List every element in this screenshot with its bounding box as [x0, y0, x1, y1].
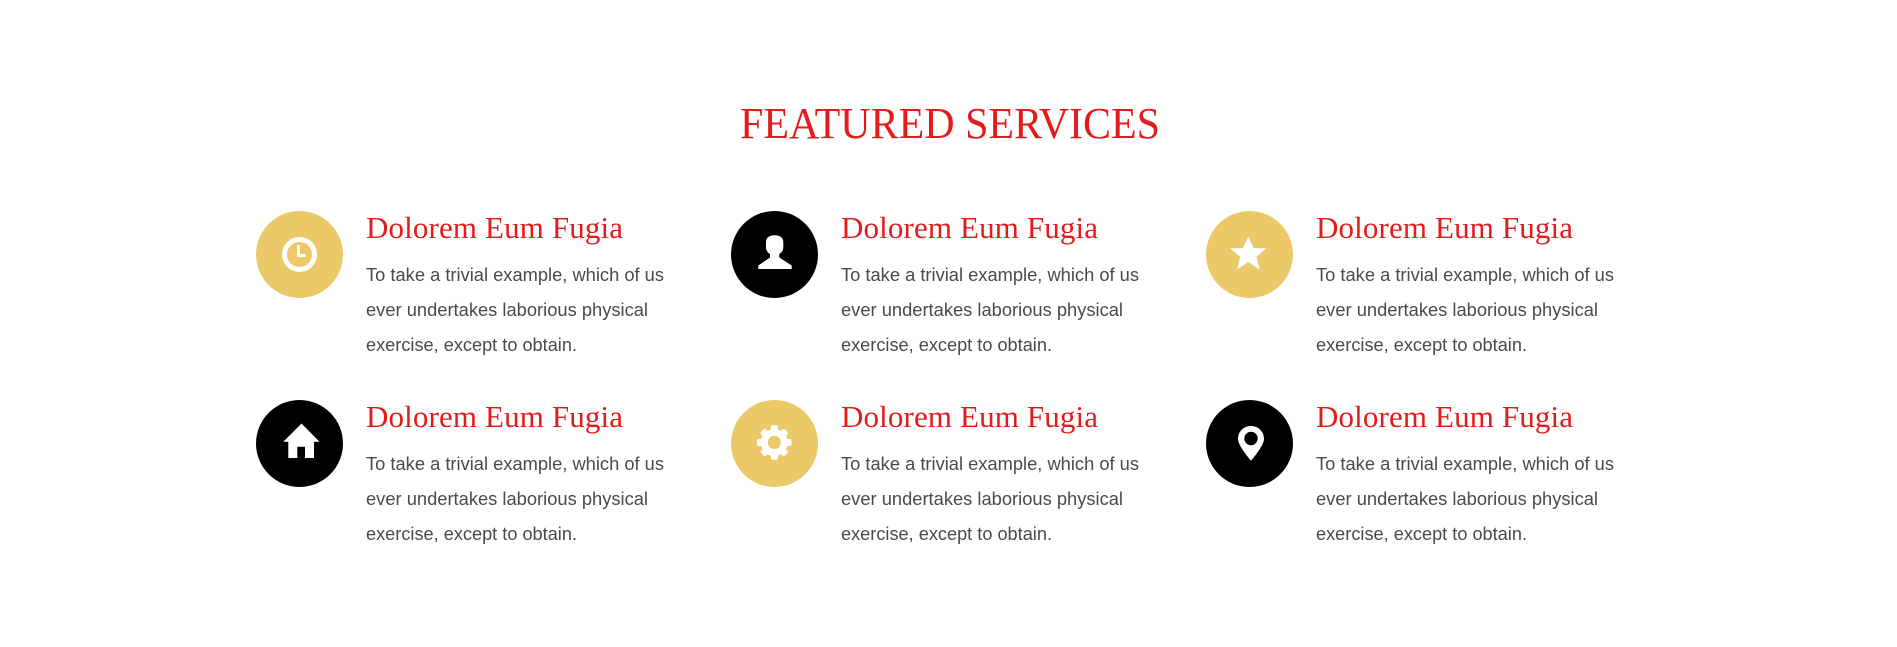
text block: To take a trivial example, which of us [366, 264, 664, 285]
panel: service 1 clock [256, 210, 664, 355]
text block [366, 264, 664, 355]
heading: Dolorem Eum Fugia [366, 399, 623, 434]
icon: gear [731, 400, 818, 487]
text block: ever undertakes laborious physical [1316, 488, 1598, 509]
text block: exercise, except to obtain. [841, 523, 1052, 544]
text block [841, 453, 1139, 544]
text block: ever undertakes laborious physical [366, 488, 648, 509]
text block [841, 264, 1139, 355]
text block: To take a trivial example, which of us [366, 453, 664, 474]
text block: exercise, except to obtain. [366, 523, 577, 544]
text block: exercise, except to obtain. [366, 334, 577, 355]
icon: star [1206, 211, 1293, 298]
icon: user [731, 211, 818, 298]
panel: service 6 location [1206, 399, 1614, 544]
text block: ever undertakes laborious physical [1316, 299, 1598, 320]
text block: To take a trivial example, which of us [1316, 453, 1614, 474]
panel: service 5 settings [731, 399, 1139, 544]
text block: ever undertakes laborious physical [366, 299, 648, 320]
heading: Dolorem Eum Fugia [841, 210, 1098, 245]
text block: ever undertakes laborious physical [841, 299, 1123, 320]
icon: clock [256, 211, 343, 298]
text block: exercise, except to obtain. [841, 334, 1052, 355]
text block: exercise, except to obtain. [1316, 523, 1527, 544]
text block: To take a trivial example, which of us [1316, 264, 1614, 285]
heading: Dolorem Eum Fugia [841, 399, 1098, 434]
panel: service 2 user [731, 210, 1139, 355]
heading: Dolorem Eum Fugia [1316, 210, 1573, 245]
panel: service 3 star [1206, 210, 1614, 355]
icon: house [256, 400, 343, 487]
text block: exercise, except to obtain. [1316, 334, 1527, 355]
icon: map pin [1206, 400, 1293, 487]
heading: Dolorem Eum Fugia [366, 210, 623, 245]
panel: service 4 home [256, 399, 664, 544]
text block [1316, 264, 1614, 355]
heading: Dolorem Eum Fugia [1316, 399, 1573, 434]
text block: ever undertakes laborious physical [841, 488, 1123, 509]
text block: To take a trivial example, which of us [841, 453, 1139, 474]
title: FEATURED SERVICES [740, 99, 1160, 148]
text block: To take a trivial example, which of us [841, 264, 1139, 285]
text block [1316, 453, 1614, 544]
text block [366, 453, 664, 544]
